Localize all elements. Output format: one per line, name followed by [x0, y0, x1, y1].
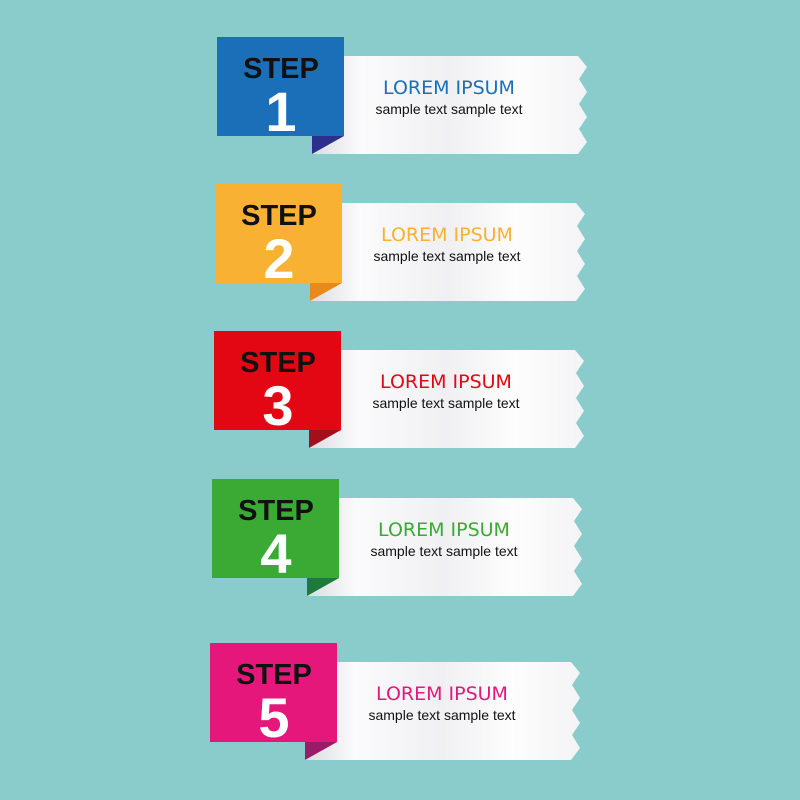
heading 2: LOREM IPSUM	[381, 224, 513, 246]
step 3: sample text sample text	[372, 395, 520, 411]
label 1: STEP	[243, 53, 319, 85]
step 2	[215, 184, 585, 301]
heading 4: LOREM IPSUM	[378, 519, 510, 541]
step 1: sample text sample text	[375, 101, 523, 117]
step 1: 1	[265, 80, 297, 143]
step 2: sample text sample text	[373, 248, 521, 264]
fold 2	[310, 283, 342, 301]
step 5: sample text sample text	[368, 707, 516, 723]
strip 2	[310, 203, 585, 301]
heading 1: LOREM IPSUM	[383, 77, 515, 99]
step 3	[214, 331, 584, 448]
label 2: STEP	[241, 200, 317, 232]
box 1	[217, 37, 344, 136]
step 4: 4	[260, 522, 292, 585]
step 1	[217, 37, 587, 154]
step 4	[212, 479, 582, 596]
strip 5	[305, 662, 580, 760]
fold 1	[312, 136, 344, 154]
strip 4	[307, 498, 582, 596]
step 4: sample text sample text	[370, 543, 518, 559]
step 3: 3	[262, 374, 294, 437]
step 5: 5	[258, 686, 290, 749]
step 5	[210, 643, 580, 760]
label 4: STEP	[238, 495, 314, 527]
box 4	[212, 479, 339, 578]
label 3: STEP	[240, 347, 316, 379]
fold 4	[307, 578, 339, 596]
heading 5: LOREM IPSUM	[376, 683, 508, 705]
box 2	[215, 184, 342, 283]
box 3	[214, 331, 341, 430]
step 2: 2	[263, 227, 295, 290]
strip 1	[312, 56, 587, 154]
heading 3: LOREM IPSUM	[380, 371, 512, 393]
fold 5	[305, 742, 337, 760]
fold 3	[309, 430, 341, 448]
label 5: STEP	[236, 659, 312, 691]
strip 3	[309, 350, 584, 448]
box 5	[210, 643, 337, 742]
